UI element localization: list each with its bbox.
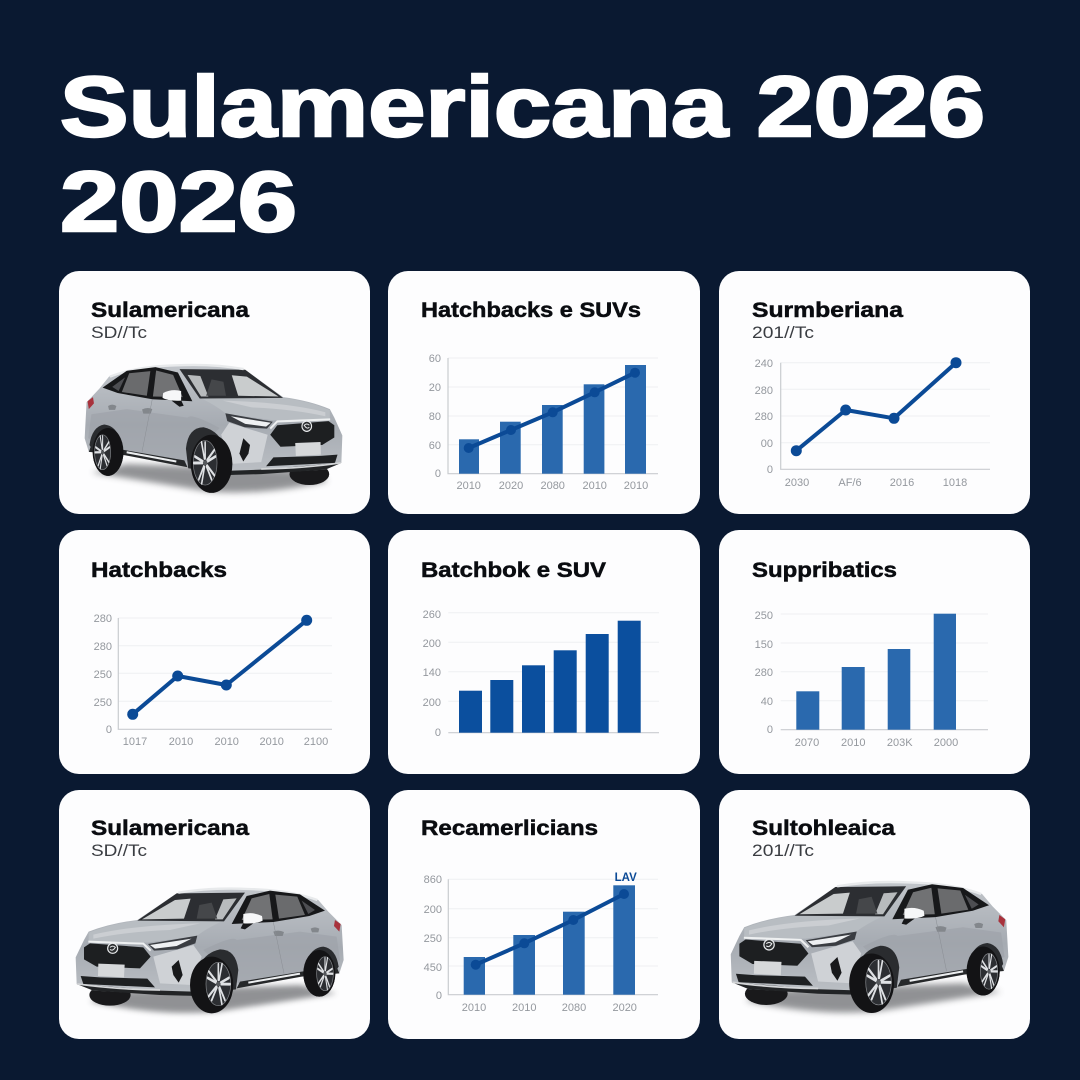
line chart: 280 <box>755 385 773 397</box>
bar and line chart: 2010 <box>462 1002 486 1014</box>
title: 2026 <box>60 155 297 250</box>
icon: silver SUV facing right <box>85 364 342 493</box>
title: Sulamericana 2026 <box>60 60 985 155</box>
bar and line chart: 2010 <box>624 480 648 492</box>
heading: Hatchbacks <box>91 559 227 582</box>
line chart: 2030 <box>785 477 809 489</box>
bar and line chart: LAV <box>615 872 637 884</box>
bar chart: 0 <box>435 727 441 739</box>
heading: Sultohleaica <box>752 817 895 840</box>
panel: Recamerlicians combo chart <box>388 790 700 1039</box>
bar chart: 200 <box>423 697 441 709</box>
line chart: 250 <box>94 669 112 681</box>
heading: Sulamericana <box>91 299 249 322</box>
panel: Hatchbacks line chart <box>59 530 370 774</box>
heading: Batchbok e SUV <box>421 559 606 582</box>
line chart <box>755 357 990 489</box>
panel: Surmberiana line chart <box>719 271 1030 514</box>
line chart: 280 <box>94 613 112 625</box>
bar chart <box>423 609 659 739</box>
panel: Sulamericana car top left <box>59 271 370 514</box>
panel: Batchbok e SUV bar chart <box>388 530 700 774</box>
bar and line chart: 450 <box>424 962 442 974</box>
line chart: AF/6 <box>838 477 862 489</box>
heading: Suppribatics <box>752 559 897 582</box>
line chart: 240 <box>755 358 773 370</box>
bar and line chart: 0 <box>435 468 441 480</box>
subtitle: SD//Tc <box>91 323 148 342</box>
bar chart: 2000 <box>934 737 958 749</box>
subtitle: SD//Tc <box>91 841 148 860</box>
bar and line chart: 860 <box>424 874 442 886</box>
bar chart: 250 <box>755 610 773 622</box>
icon: silver SUV facing left <box>76 888 344 1013</box>
bar chart: 200 <box>423 638 441 650</box>
bar and line chart: 80 <box>429 411 441 423</box>
line chart: 280 <box>94 641 112 653</box>
bar chart: 260 <box>423 609 441 621</box>
bar chart <box>755 610 988 749</box>
bar and line chart: 60 <box>429 353 441 365</box>
bar and line chart: 200 <box>424 904 442 916</box>
title <box>60 60 985 250</box>
line chart: 0 <box>767 464 773 476</box>
bar and line chart: 2080 <box>540 480 565 492</box>
heading: Sulamericana <box>91 817 249 840</box>
bar chart: 0 <box>767 724 773 736</box>
bar and line chart: 0 <box>436 990 442 1002</box>
bar and line chart: 2080 <box>562 1002 586 1014</box>
bar and line chart: 60 <box>429 440 441 452</box>
bar chart: 40 <box>761 696 773 708</box>
bar and line chart <box>429 353 658 492</box>
panel: Suppribatics bar chart <box>719 530 1030 774</box>
line chart: 1017 <box>123 736 147 748</box>
heading: Surmberiana <box>752 299 903 322</box>
bar and line chart <box>424 872 658 1014</box>
line chart: 2100 <box>304 736 328 748</box>
bar chart: 140 <box>423 667 441 679</box>
line chart <box>94 613 332 748</box>
panel: Sultohleaica car bottom right <box>719 790 1030 1039</box>
bar chart: 280 <box>755 667 773 679</box>
line chart: 2010 <box>259 736 284 748</box>
bar and line chart: 2010 <box>456 480 481 492</box>
bar and line chart: 2020 <box>499 480 523 492</box>
line chart: 0 <box>106 724 112 736</box>
heading: Hatchbacks e SUVs <box>421 299 641 322</box>
bar and line chart: 20 <box>429 382 441 394</box>
bar chart: 2010 <box>841 737 866 749</box>
line chart: 2010 <box>214 736 239 748</box>
line chart: 1018 <box>943 477 967 489</box>
line chart: 280 <box>755 411 773 423</box>
subtitle: 201//Tc <box>752 323 815 342</box>
line chart: 2010 <box>169 736 193 748</box>
icon: silver SUV facing left <box>731 881 1008 1013</box>
bar and line chart: 2010 <box>512 1002 537 1014</box>
line chart: 2016 <box>890 477 914 489</box>
line chart: 250 <box>94 697 112 709</box>
bar and line chart: 2020 <box>612 1002 637 1014</box>
bar chart: 150 <box>755 639 773 651</box>
bar and line chart: 250 <box>424 933 442 945</box>
panel: Hatchbacks e SUVs combo chart <box>388 271 700 514</box>
subtitle: 201//Tc <box>752 841 815 860</box>
panel: Sulamericana car bottom left <box>59 790 370 1039</box>
bar and line chart: 2010 <box>582 480 607 492</box>
heading: Recamerlicians <box>421 817 598 840</box>
bar chart: 2070 <box>795 737 819 749</box>
line chart: 00 <box>761 438 773 450</box>
bar chart: 203K <box>887 737 913 749</box>
